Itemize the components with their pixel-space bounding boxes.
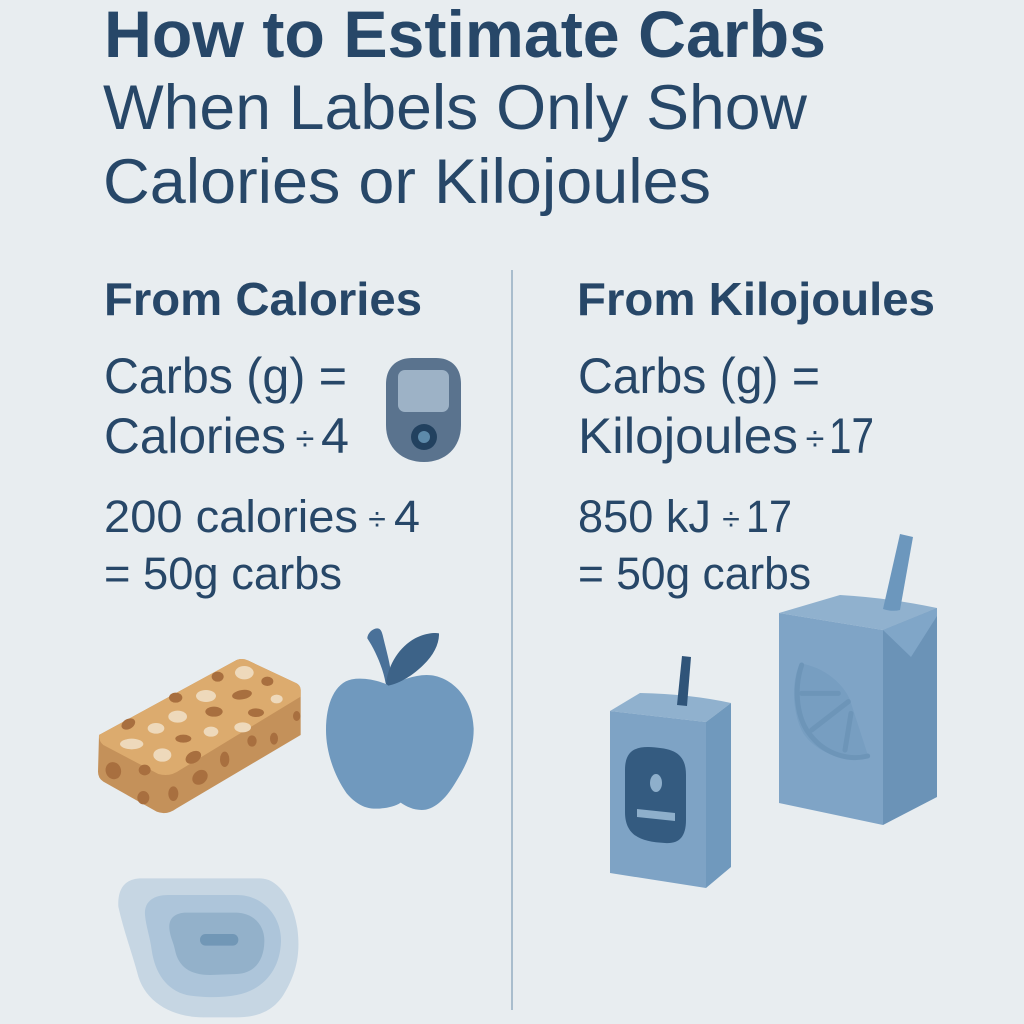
- example: kilojoules: 17: [746, 491, 792, 542]
- formula: kilojoules: [578, 348, 874, 464]
- icon: apple: [326, 628, 474, 810]
- heading: from calories: From Calories: [104, 273, 422, 325]
- title: Calories or Kilojoules: [103, 147, 711, 217]
- formula: kilojoules: 17: [829, 408, 874, 464]
- example: calories: = 50g carbs: [104, 548, 342, 599]
- icon: granola bar: [98, 659, 301, 813]
- formula: calories: 4: [321, 408, 349, 464]
- panel: from kilojoules: [577, 273, 937, 888]
- icon: food pouch: [118, 878, 298, 1017]
- example: calories: 200 calories: [104, 491, 358, 542]
- example: kilojoules: 850 kJ: [578, 491, 711, 542]
- formula: calories: [104, 348, 349, 464]
- formula: kilojoules: ÷: [806, 420, 824, 458]
- title: [103, 0, 826, 217]
- icon: large juice box: [779, 534, 937, 825]
- heading: from kilojoules: From Kilojoules: [577, 273, 935, 325]
- icon: small juice box: [610, 656, 731, 888]
- example: kilojoules: = 50g carbs: [578, 548, 811, 599]
- title: When Labels Only Show: [103, 73, 808, 143]
- example: calories: ÷: [368, 501, 386, 537]
- example: kilojoules: [578, 491, 811, 599]
- formula: kilojoules: Carbs (g) =: [578, 348, 820, 404]
- example: calories: 4: [394, 491, 420, 542]
- formula: calories: Calories: [104, 408, 286, 464]
- formula: kilojoules: Kilojoules: [578, 408, 798, 464]
- formula: calories: Carbs (g) =: [104, 348, 347, 404]
- icon: glucose meter: [386, 358, 461, 462]
- formula: calories: ÷: [296, 420, 314, 458]
- example: kilojoules: ÷: [722, 501, 740, 537]
- example: calories: [104, 491, 420, 599]
- panel: from calories: [98, 273, 474, 1017]
